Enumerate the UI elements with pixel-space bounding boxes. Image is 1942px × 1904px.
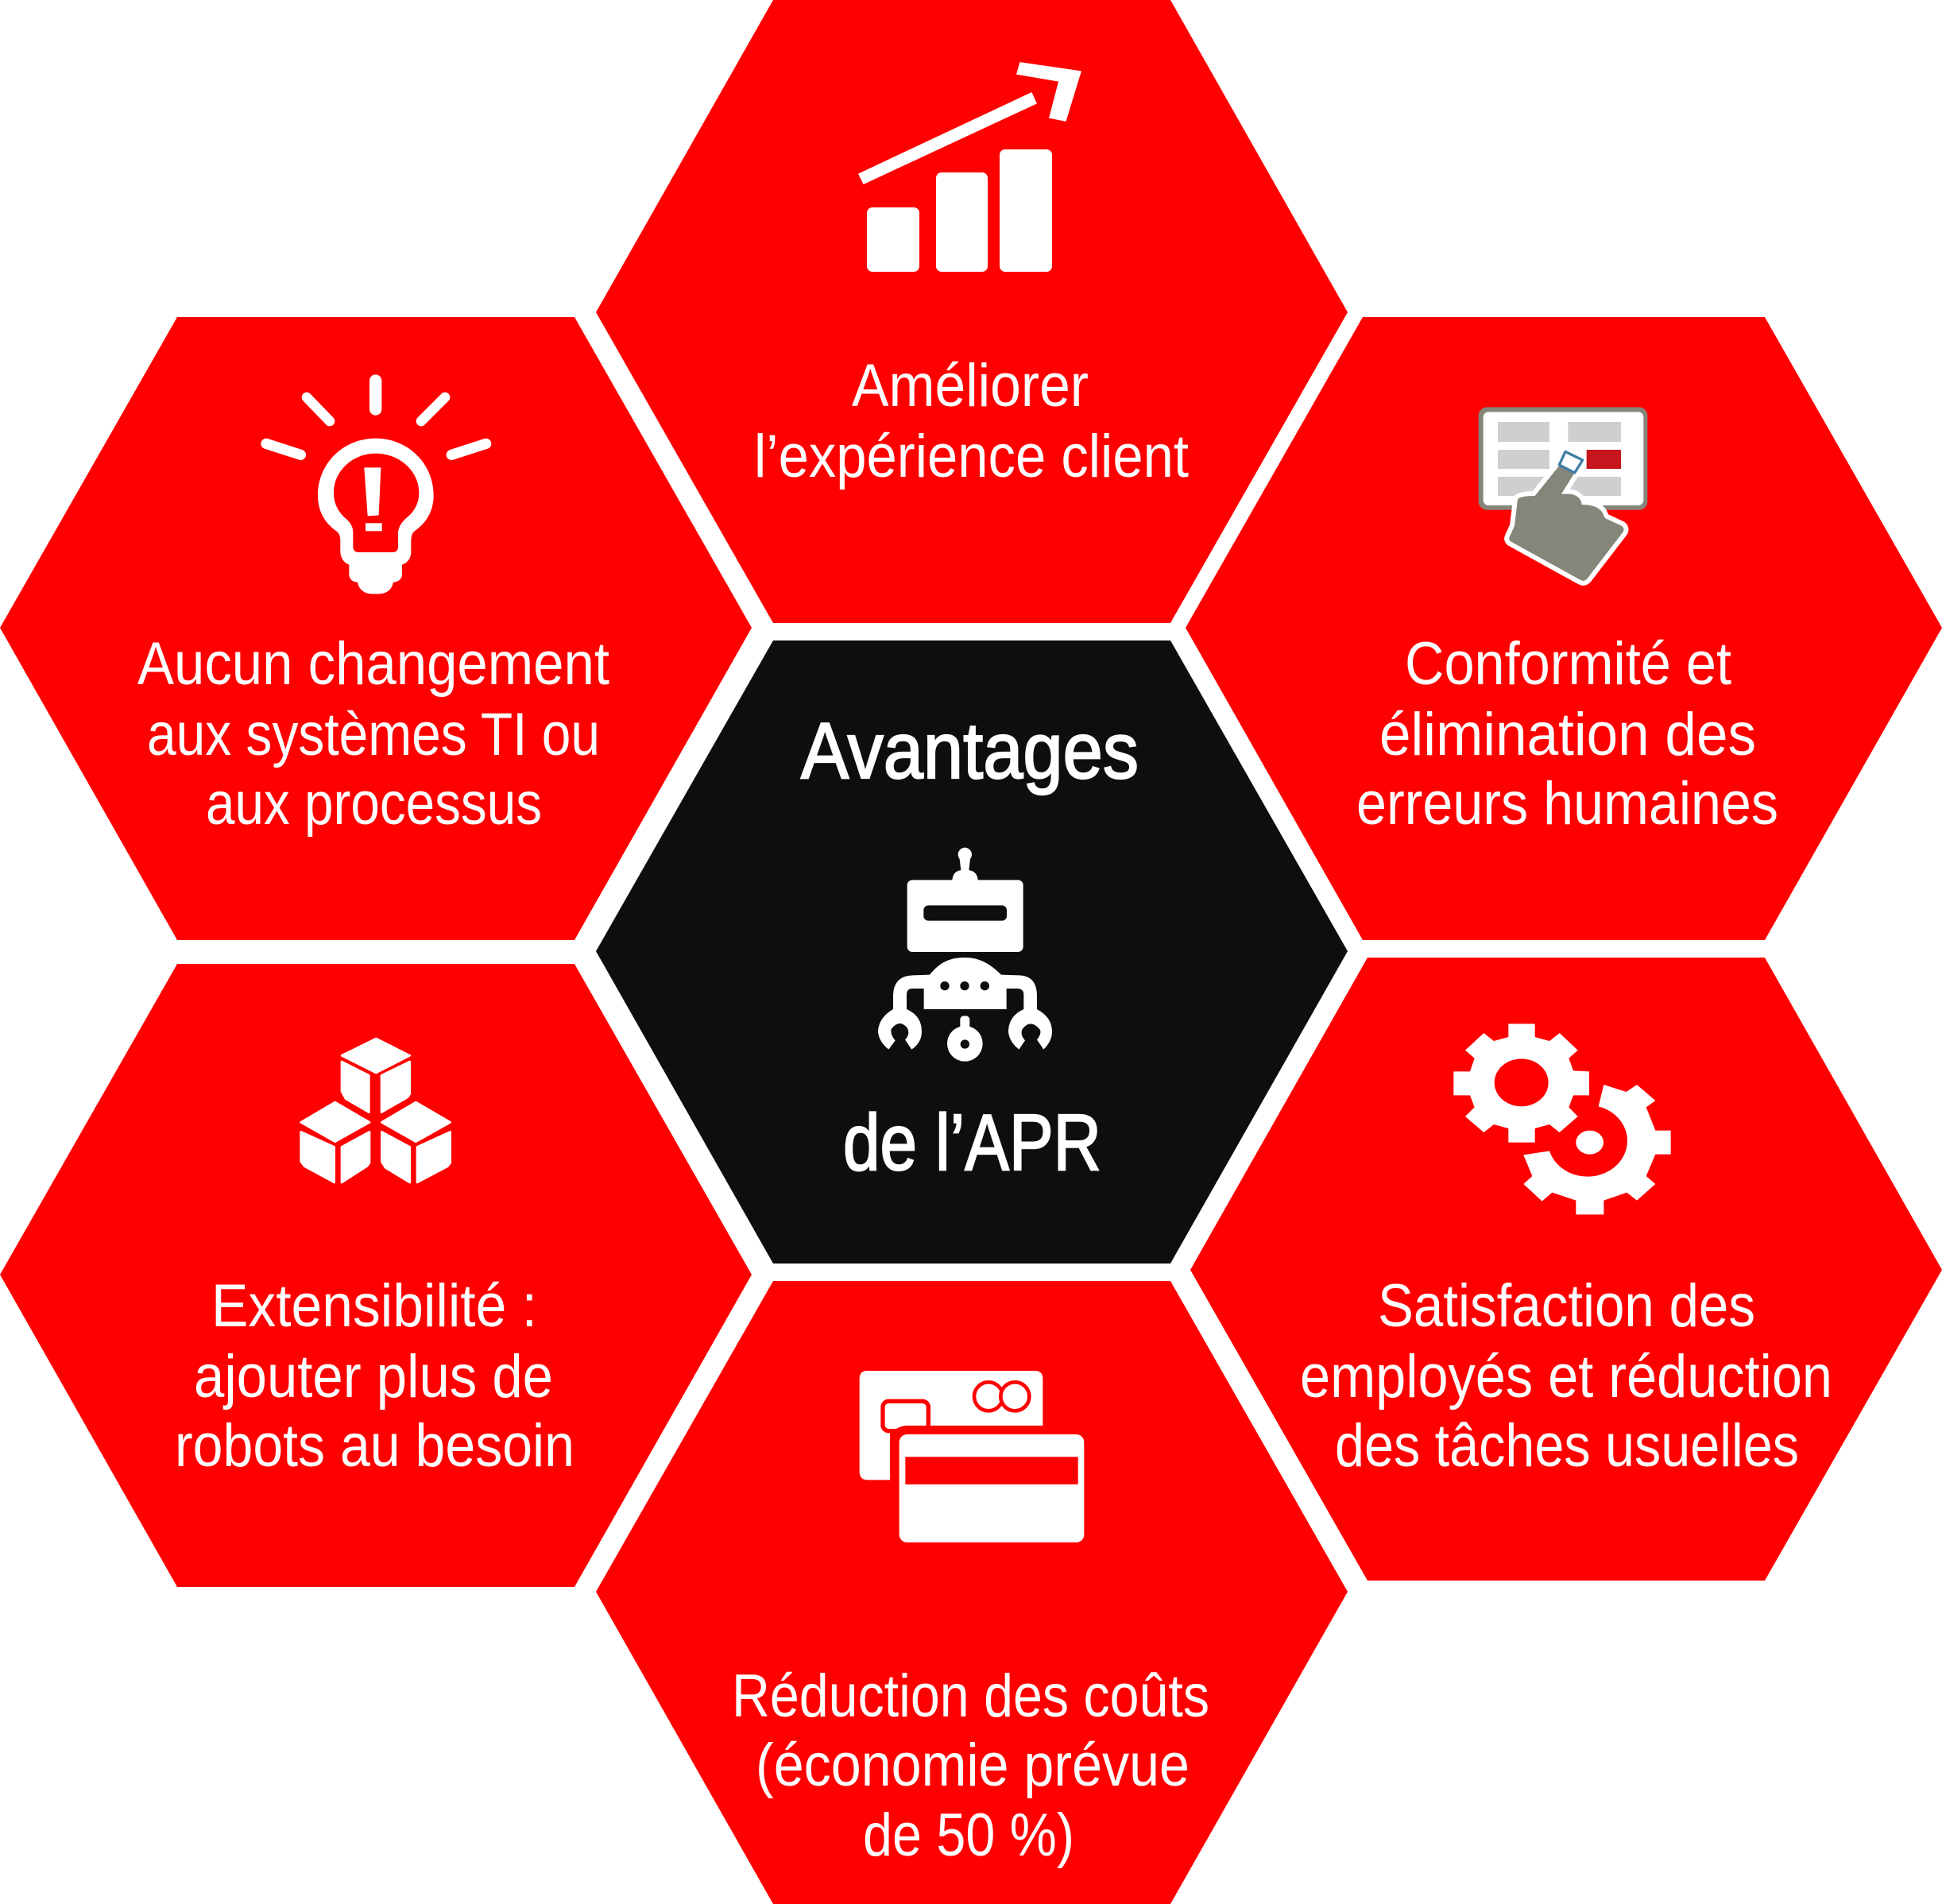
hexagon: lower left bbox=[0, 964, 752, 1587]
text: aucun changement: aux processus bbox=[206, 770, 542, 838]
text: réduction des coûts bbox=[732, 1662, 1209, 1869]
text: aucun changement: Aucun changement bbox=[137, 630, 609, 698]
panel: conformité bbox=[1186, 317, 1942, 940]
text: aucun changement: aux systèmes TI ou bbox=[147, 701, 600, 768]
heading: de l'APR: de l’APR bbox=[843, 1098, 1101, 1187]
text: extensibilité bbox=[175, 1272, 574, 1480]
text: satisfaction des employés: des tâches usuelles bbox=[1335, 1412, 1799, 1480]
text: satisfaction des employés: employés et réduction bbox=[1300, 1343, 1832, 1411]
icon: gears bbox=[1453, 1024, 1671, 1214]
panel: améliorer l'expérience client bbox=[596, 0, 1348, 623]
hexagon: lower right bbox=[1190, 958, 1942, 1581]
icon: robot bbox=[878, 848, 1052, 1062]
panel: extensibilité bbox=[0, 964, 752, 1587]
text: conformité: Conformité et bbox=[1405, 630, 1731, 698]
hexagon: bottom bbox=[596, 1281, 1348, 1904]
panel: réduction des coûts bbox=[596, 1281, 1348, 1904]
icon: credit cards bbox=[860, 1371, 1084, 1542]
text: réduction des coûts: de 50 %) bbox=[863, 1801, 1074, 1869]
hexagon: top bbox=[596, 0, 1348, 623]
text: conformité: élimination des bbox=[1379, 701, 1756, 768]
text: conformité: erreurs humaines bbox=[1356, 770, 1778, 838]
text: satisfaction des employés bbox=[1300, 1272, 1832, 1480]
text: améliorer l'expérience client: l’expérience client bbox=[754, 423, 1189, 490]
icon: stacked cubes bbox=[301, 1039, 451, 1182]
hexagon: centre bbox=[596, 640, 1348, 1264]
text: améliorer l'expérience client bbox=[754, 352, 1189, 490]
hexagon: upper right bbox=[1186, 317, 1942, 940]
icon: light bulb with exclamation mark bbox=[266, 381, 486, 594]
text: aucun changement bbox=[137, 630, 609, 838]
panel: satisfaction des employés bbox=[1190, 958, 1942, 1581]
text: extensibilité: Extensibilité : bbox=[211, 1272, 537, 1340]
text: extensibilité: robots au besoin bbox=[175, 1412, 574, 1480]
text: conformité bbox=[1356, 630, 1778, 838]
text: améliorer l'expérience client: Améliorer bbox=[852, 352, 1089, 420]
text: réduction des coûts: (économie prévue bbox=[756, 1732, 1190, 1799]
text: satisfaction des employés: Satisfaction des bbox=[1378, 1272, 1755, 1340]
hexagon: upper left bbox=[0, 317, 752, 940]
text: extensibilité: ajouter plus de bbox=[194, 1343, 553, 1411]
icon: rising bar chart with arrow bbox=[859, 63, 1081, 272]
panel: aucun changement bbox=[0, 317, 752, 940]
text: réduction des coûts: Réduction des coûts bbox=[732, 1662, 1209, 1730]
panel: centre, avantages de l'APR bbox=[596, 640, 1348, 1264]
icon: hand touching a form bbox=[1479, 407, 1647, 581]
heading: avantages: Avantages bbox=[801, 706, 1139, 795]
